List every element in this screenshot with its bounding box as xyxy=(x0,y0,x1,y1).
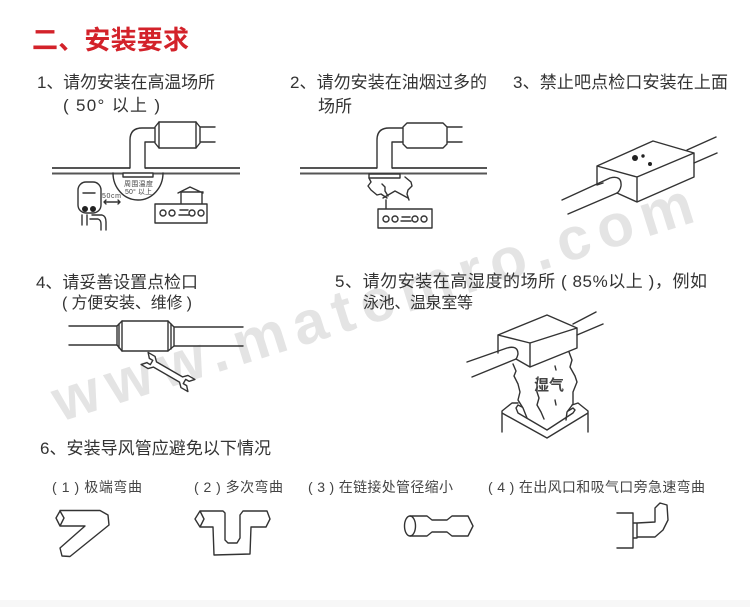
case 3 reduced diameter: ( 3 ) 在链接处管径缩小 xyxy=(308,479,453,495)
temperature zone: 50° 以上 xyxy=(125,187,152,196)
case 2 multiple bends xyxy=(194,479,283,555)
heading: item 1: 1、请勿安装在高温场所 xyxy=(37,73,215,92)
duct and filter xyxy=(377,123,462,168)
label: moisture: 湿气 xyxy=(534,376,564,394)
vent xyxy=(369,174,400,178)
floor lines xyxy=(52,168,240,174)
heading: item 4: ( 方便安装、维修 ) xyxy=(62,294,192,312)
case 2 multiple bends: ( 2 ) 多次弯曲 xyxy=(194,479,283,495)
label: 50cm arrow: 50cm xyxy=(102,193,121,200)
heading: item 5: 5、请勿安装在高湿度的场所 ( 85%以上 )，例如 xyxy=(335,272,707,291)
heading: item 1: ( 50° 以上 ) xyxy=(63,96,160,115)
icon: stove xyxy=(155,187,207,223)
panel: item 2 oil smoke xyxy=(290,73,487,228)
moisture xyxy=(513,352,577,420)
heading: item 4 xyxy=(36,273,198,312)
duct box xyxy=(562,137,717,214)
floor lines xyxy=(300,168,487,174)
duct xyxy=(69,321,243,351)
heading: item 4: 4、请妥善设置点检口 xyxy=(36,273,198,292)
heading: item 3: 3、禁止吧点检口安装在上面 xyxy=(513,73,728,92)
watermark: www.matemro.com xyxy=(43,170,701,435)
footer strip xyxy=(0,600,750,607)
panel: item 6 duct installation cases xyxy=(40,439,705,556)
heading: item 2: 2、请勿安装在油烟过多的 xyxy=(290,73,487,92)
title: 二、安装要求 xyxy=(32,25,189,55)
panel: item 4 access point xyxy=(36,273,243,392)
icon: wrench xyxy=(141,352,195,392)
case 3 reduced diameter xyxy=(308,479,473,536)
heading: item 2 xyxy=(290,73,487,116)
heading: item 5 xyxy=(335,272,707,312)
case 4 sharp bend at outlet: ( 4 ) 在出风口和吸气口旁急速弯曲 xyxy=(488,479,705,495)
heading: item 5: 泳池、温泉室等 xyxy=(363,294,473,312)
temperature zone: 周围温度 xyxy=(124,179,153,188)
temperature zone xyxy=(113,173,163,200)
heading: item 6: 6、安装导风管应避免以下情况 xyxy=(40,439,271,458)
panel: item 1 high temperature xyxy=(37,73,240,230)
panel: item 3 no ceiling-side access xyxy=(513,73,728,214)
smoke xyxy=(368,177,412,200)
icon: water heater xyxy=(78,182,106,230)
heading: item 1 xyxy=(37,73,215,115)
icon: stove xyxy=(378,191,432,228)
heading: item 2: 场所 xyxy=(318,97,352,116)
case 1 extreme bend: ( 1 ) 极端弯曲 xyxy=(52,479,142,495)
panel: item 5 high humidity xyxy=(335,272,707,438)
case 4 sharp bend at outlet xyxy=(488,479,705,548)
case 1 extreme bend xyxy=(52,479,142,556)
duct and filter xyxy=(130,122,215,168)
duct box xyxy=(467,312,603,377)
vent xyxy=(502,403,588,438)
label: 50cm arrow xyxy=(102,193,121,204)
